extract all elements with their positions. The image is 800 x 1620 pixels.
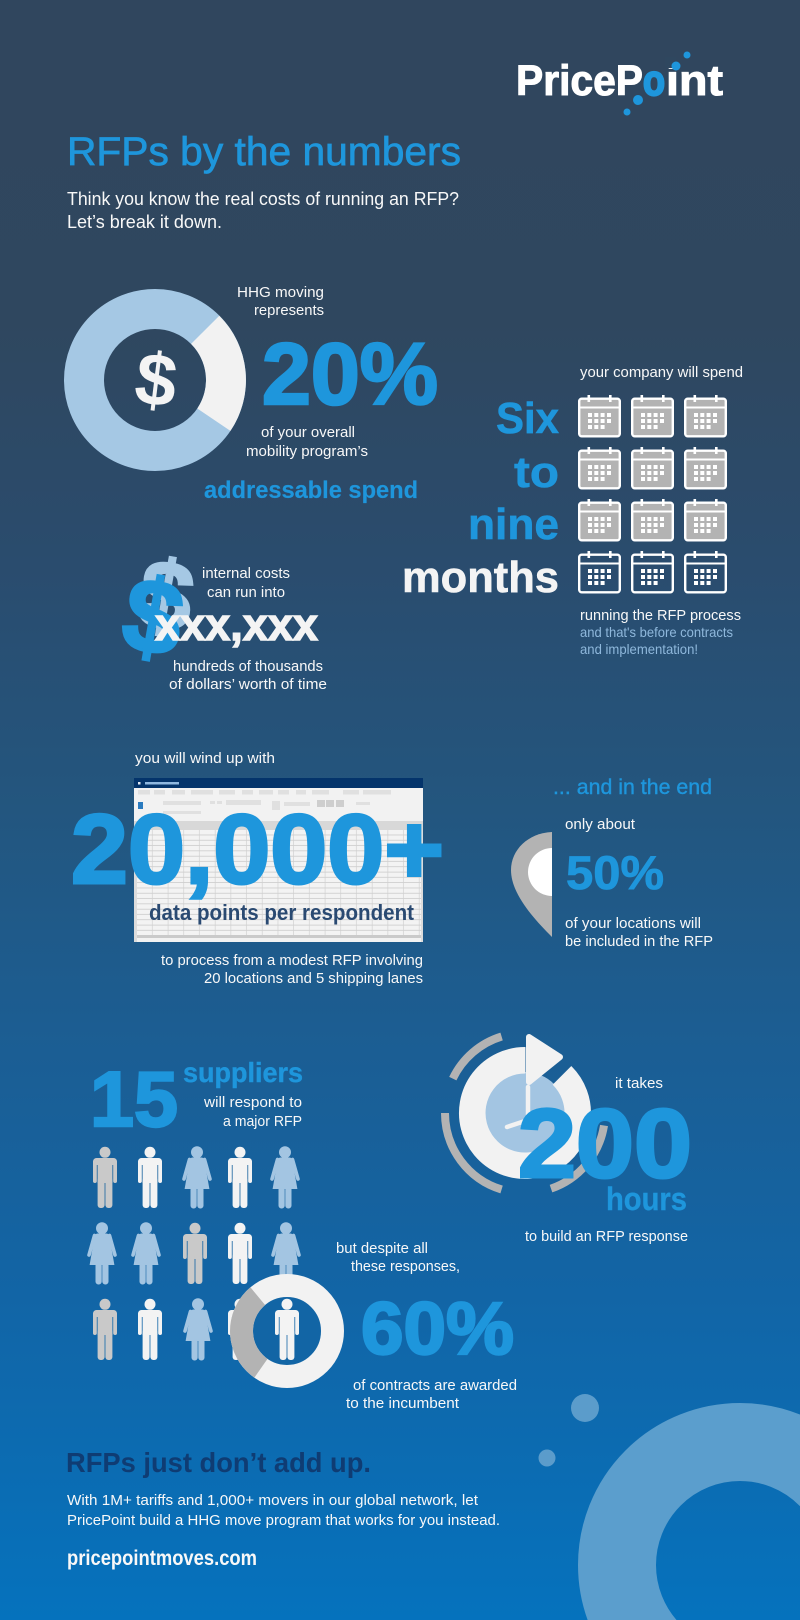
text: of your overall mobility program's: mobility program’s <box>246 443 368 460</box>
text: addressable spend: addressable spend <box>204 477 418 504</box>
text: running the RFP process: running the RFP process <box>580 607 741 624</box>
icon: half map pin <box>511 832 552 937</box>
text: of your locations <box>565 915 713 950</box>
panel: data points <box>71 750 444 987</box>
stat: 60%: 60% <box>361 1287 514 1370</box>
text: hundreds of thousands: hundreds of thousands <box>173 658 323 675</box>
title: RFPs by the numbers <box>67 130 461 174</box>
text: running the RFP process: and that's before contracts <box>580 624 733 640</box>
panel: footer call to action <box>66 1447 500 1570</box>
stat: 15: 15 <box>90 1055 178 1143</box>
panel: 50% of locations <box>511 776 713 950</box>
text: network description <box>67 1492 500 1529</box>
icon grid: people <box>89 1147 299 1360</box>
text: suppliers: suppliers <box>183 1057 303 1088</box>
text: internal costs can run into: can run into <box>207 584 285 601</box>
intro text <box>67 188 459 232</box>
text: of your overall mobility program's <box>246 424 368 460</box>
stat: 20,000+: 20,000+ <box>71 794 444 904</box>
text: data points per respondent: data points per respondent <box>149 900 415 925</box>
text: HHG moving represents <box>237 284 324 319</box>
panel: addressable spend <box>84 284 438 504</box>
text: of contracts are awarded: to the incumbent <box>346 1395 460 1412</box>
panel: 15 suppliers <box>89 1055 303 1360</box>
text: network description: With 1M+ tariffs and 1,000+ movers in our global network, let <box>67 1492 479 1509</box>
donut chart with person <box>230 1286 332 1378</box>
panel: 200 hours <box>445 1036 692 1245</box>
text: of your locations: of your locations will <box>565 915 701 932</box>
stat: six to nine months: to <box>514 448 559 497</box>
text: network description: PricePoint build a HHG move program that works for you instead. <box>67 1512 500 1529</box>
icon grid: calendars <box>579 395 726 592</box>
stat: six to nine months: months <box>402 553 559 602</box>
text: but despite all these responses: but despite all <box>336 1240 428 1257</box>
logo: PricePoint <box>516 52 723 116</box>
text: hundreds of thousands <box>169 658 327 693</box>
text: running the RFP process: and implementation! <box>580 641 698 657</box>
text: but despite all these responses <box>336 1240 460 1275</box>
text: running the RFP process <box>580 607 741 657</box>
stat: 20%: 20% <box>262 326 438 423</box>
text: of contracts are awarded: of contracts are awarded <box>353 1377 517 1394</box>
text: to process from a modest RFP: to process from a modest RFP involving <box>161 952 423 969</box>
text: will respond to a major RFP: will respond to <box>203 1094 302 1111</box>
text: only about: only about <box>565 816 636 833</box>
decorative circles <box>538 1394 800 1620</box>
icon: dollar signs: $ <box>130 539 201 653</box>
text: internal costs can run into <box>202 565 290 601</box>
heading: RFPs just don't add up: RFPs just don’t add up. <box>66 1447 371 1478</box>
text: website: pricepointmoves.com <box>67 1547 257 1570</box>
intro text: Let’s break it down. <box>67 211 222 232</box>
text: and in the end: ... and in the end <box>553 776 712 799</box>
stat: six to nine months: nine <box>468 500 559 549</box>
text: internal costs can run into: internal costs <box>202 565 290 582</box>
text: your company will spend: your company will spend <box>580 364 743 381</box>
text: will respond to a major RFP <box>203 1094 302 1130</box>
donut chart: 20 percent: $ <box>131 336 182 423</box>
text: to process from a modest RFP <box>161 952 423 987</box>
panel: 60% to incumbent <box>230 1240 517 1412</box>
panel: internal costs <box>115 539 327 693</box>
text: HHG moving represents: represents <box>254 302 324 319</box>
text: to process from a modest RFP: 20 locations and 5 shipping lanes <box>204 970 423 987</box>
text: to build an RFP response: to build an RFP response <box>525 1228 688 1245</box>
text: of your overall mobility program's: of your overall <box>261 424 355 441</box>
logo: PricePoint: PriceP <box>516 57 643 105</box>
text: of contracts are awarded <box>346 1377 517 1412</box>
stat: six to nine months: Six <box>496 394 560 443</box>
stat: 200: 200 <box>518 1089 692 1198</box>
logo: PricePoint: o <box>643 57 665 105</box>
intro text: Think you know the real costs of running an RFP? <box>67 188 459 209</box>
text: will respond to a major RFP: a major RFP <box>223 1113 302 1130</box>
spreadsheet screenshot <box>134 778 423 942</box>
stat: six to nine months <box>402 394 560 602</box>
text: HHG moving represents: HHG moving <box>237 284 324 301</box>
text: it takes: it takes <box>615 1075 663 1092</box>
stat: xxx,xxx: xxx,xxx <box>155 599 318 650</box>
logo: PricePoint: int <box>666 57 723 105</box>
text: but despite all these responses: these responses, <box>351 1258 460 1275</box>
icon: dollar signs: $ <box>115 555 192 680</box>
text: you will wind up with: you will wind up with <box>135 750 275 767</box>
panel: six to nine months <box>402 364 743 657</box>
donut chart: 20 percent <box>84 309 246 451</box>
text: hours: hours <box>606 1181 687 1217</box>
icon: clock with arrow <box>445 1036 604 1190</box>
stat: 50%: 50% <box>566 846 664 899</box>
text: of your locations: be included in the RFP <box>565 933 713 950</box>
text: hundreds of thousands: of dollars’ worth of time <box>169 676 327 693</box>
